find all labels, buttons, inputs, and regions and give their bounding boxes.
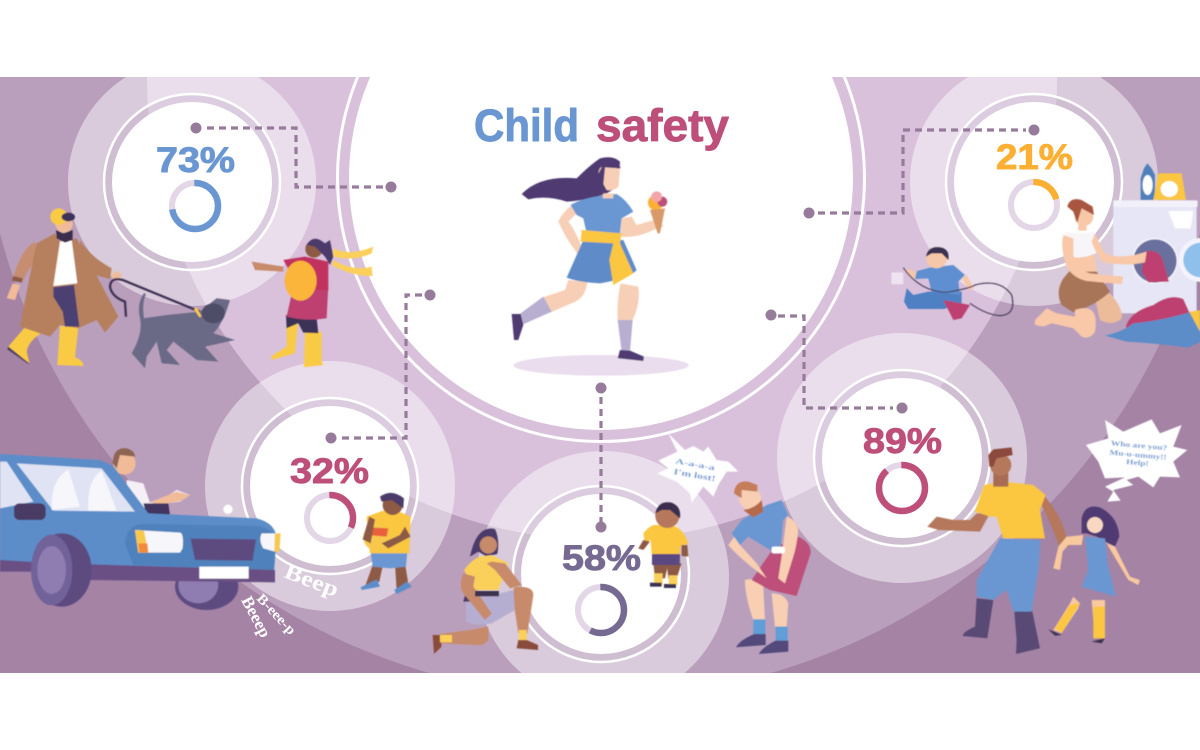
stranger xyxy=(927,447,1069,654)
beep sound text: Beeep xyxy=(237,593,275,641)
father xyxy=(728,481,811,654)
speech bubble: who are you: Who are you? xyxy=(1110,438,1168,452)
illustration: boy with ball xyxy=(361,493,412,594)
infographic: child safety xyxy=(0,77,1200,673)
bumper xyxy=(0,560,275,582)
panel: 21% stat xyxy=(910,58,1158,306)
licence plate xyxy=(199,567,249,579)
detergent bottle xyxy=(1141,163,1155,200)
donut 58% xyxy=(578,587,624,633)
illustration: mother with baby, cord and washing machine xyxy=(891,163,1200,348)
rear wheel xyxy=(32,533,92,607)
driver xyxy=(113,448,190,515)
value 32%: 32% xyxy=(290,452,369,491)
beep sound text: Beep xyxy=(281,558,342,602)
donut 73% xyxy=(172,183,218,229)
value 73%: 73% xyxy=(156,141,235,180)
headlights xyxy=(135,530,183,553)
beep sound text: B-eee-p xyxy=(253,591,298,638)
illustration: mother, lost child and father xyxy=(433,433,811,654)
car body xyxy=(0,454,277,572)
grille xyxy=(191,539,256,561)
kneeling woman xyxy=(433,529,538,654)
illustration: man with dog and frightened girl xyxy=(7,208,373,368)
illustration: angry driver in blue car xyxy=(0,448,281,610)
detergent box xyxy=(1153,173,1186,200)
connector lines xyxy=(207,128,1026,525)
title xyxy=(474,100,729,151)
donut 89% xyxy=(879,465,925,511)
background bands xyxy=(0,77,1200,673)
speech bubble: who are you: Help! xyxy=(1126,457,1149,468)
man in coat xyxy=(7,208,121,366)
girl with backpack xyxy=(252,239,373,367)
illustration: running girl with ice cream xyxy=(512,157,689,376)
panel: 58% stat xyxy=(478,451,729,673)
dog xyxy=(132,293,235,368)
speech bubble: who are you xyxy=(1086,419,1187,502)
panel: 89% stat xyxy=(777,333,1027,583)
speech bubble: lost xyxy=(657,433,738,503)
woman xyxy=(1035,199,1147,338)
central white circle xyxy=(336,77,866,443)
title: safety xyxy=(596,100,729,151)
laundry pile xyxy=(1105,297,1200,348)
girl in blue dress xyxy=(1048,506,1140,643)
front wheel xyxy=(175,563,238,610)
value 89%: 89% xyxy=(863,422,942,461)
connector dots xyxy=(190,122,1040,532)
donut 21% xyxy=(1011,182,1057,228)
speech bubble: who are you: Mu-u-ummy!! xyxy=(1109,448,1167,462)
beep sound text xyxy=(237,558,342,641)
speech bubble: lost: I'm lost! xyxy=(673,467,717,483)
value 58%: 58% xyxy=(562,539,641,578)
illustration: stranger grabbing girl xyxy=(927,419,1187,654)
donut 32% xyxy=(307,495,353,541)
baby xyxy=(903,247,1013,320)
panel: 32% stat xyxy=(205,361,455,611)
value 21%: 21% xyxy=(996,138,1073,177)
leash xyxy=(110,279,200,317)
crying child xyxy=(638,502,688,588)
socket xyxy=(891,272,903,284)
washing machine xyxy=(1113,200,1200,313)
panel: 73% stat xyxy=(68,58,316,306)
speech bubble: lost: A-a-a-a xyxy=(675,456,716,472)
title: Child xyxy=(474,100,579,151)
hood ornament xyxy=(223,505,233,514)
